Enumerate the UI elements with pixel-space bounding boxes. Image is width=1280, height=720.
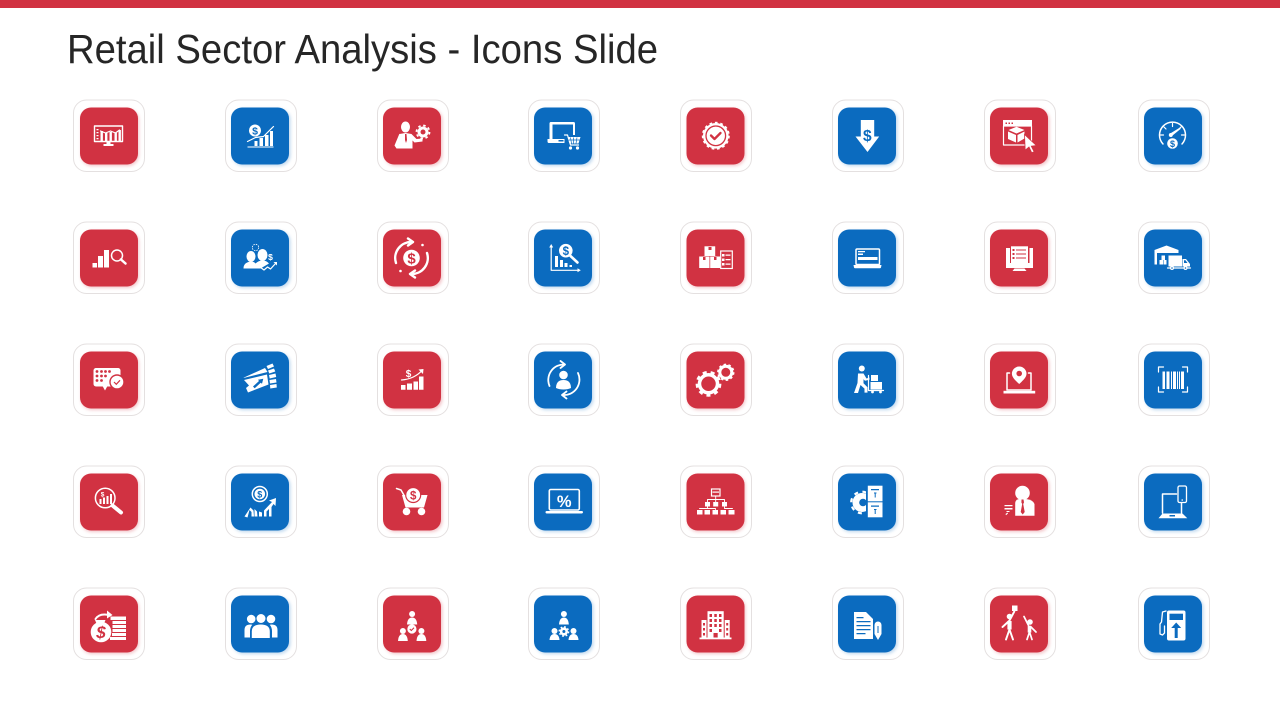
icon: monitor chart bbox=[94, 126, 122, 146]
icon: organization chart bbox=[697, 489, 734, 514]
tile: office building bbox=[680, 588, 752, 660]
tile: fuel pump up arrow bbox=[1138, 588, 1210, 660]
tile: coin with growth bbox=[226, 466, 296, 538]
icon: laptop discount: % bbox=[557, 493, 572, 511]
icon: gear with boxes bbox=[851, 485, 883, 518]
icon: laptop and cart bbox=[547, 122, 580, 150]
tile: adult and child reaching bbox=[984, 588, 1056, 660]
icon: team with dollar trend: $ bbox=[268, 252, 273, 262]
tile: team gear bbox=[528, 588, 600, 660]
tile: gear with boxes bbox=[832, 466, 904, 538]
icon: barcode scan bbox=[1158, 367, 1188, 392]
tile: boxes and checklist bbox=[680, 222, 752, 294]
tile: dollar growth chart bbox=[226, 100, 296, 172]
icon: dollar growth chart: $ bbox=[252, 126, 258, 138]
tile: two gears bbox=[680, 344, 752, 416]
tile: laptop and phone bbox=[1138, 466, 1210, 538]
tile: customer cycle bbox=[528, 344, 600, 416]
tile: worker pushing cart bbox=[832, 344, 904, 416]
title: Retail Sector Analysis - Icons Slide bbox=[67, 26, 658, 72]
icon: price down arrow: $ bbox=[863, 128, 872, 145]
icon: laptop screen bbox=[854, 249, 882, 268]
tile: laptop screen bbox=[832, 222, 904, 294]
tile: tickets and cash bbox=[226, 344, 296, 416]
icon: laptop location pin bbox=[1004, 366, 1035, 394]
icon: boxes and checklist bbox=[699, 246, 732, 268]
tile: financial magnifier bbox=[74, 466, 144, 538]
tile: dollar cycle bbox=[378, 222, 448, 294]
tile: warehouse and truck bbox=[1138, 222, 1210, 294]
icon: monitor checklist bbox=[1006, 246, 1033, 271]
icon: fuel pump up arrow bbox=[1160, 610, 1186, 640]
tile: chart with dollar magnifier bbox=[528, 222, 600, 294]
tile: laptop discount bbox=[528, 466, 600, 538]
icon: cost gauge: $ bbox=[1170, 139, 1175, 149]
icon: financial magnifier: $ bbox=[101, 492, 105, 498]
tile: organization chart bbox=[680, 466, 752, 538]
tile: laptop and cart bbox=[528, 100, 600, 172]
icon: businessman with gear bbox=[394, 122, 430, 148]
icon: chart with dollar magnifier: $ bbox=[563, 246, 570, 258]
tile: barcode scan bbox=[1138, 344, 1210, 416]
tile: businessman with gear bbox=[378, 100, 448, 172]
icon: rising revenue bars: $ bbox=[406, 369, 412, 380]
icon: team gear bbox=[550, 611, 578, 640]
tile: rising revenue bars bbox=[378, 344, 448, 416]
icon: businessman with notes bbox=[1004, 486, 1034, 516]
icon: money bag and coins: $ bbox=[95, 623, 106, 642]
tile: businessman with notes bbox=[984, 466, 1056, 538]
icon: warehouse and truck bbox=[1154, 246, 1190, 270]
icon: calendar chat check bbox=[94, 368, 124, 390]
tile: bars and magnifier bbox=[74, 222, 144, 294]
tile: web shop box and cursor bbox=[984, 100, 1056, 172]
icon: worker pushing cart bbox=[854, 366, 884, 393]
tile: monitor chart bbox=[74, 100, 144, 172]
top accent bar bbox=[0, 0, 1280, 8]
tile: group of people bbox=[226, 588, 296, 660]
tile: document and pen bbox=[832, 588, 904, 660]
tile: laptop location pin bbox=[984, 344, 1056, 416]
tile: monitor checklist bbox=[984, 222, 1056, 294]
icon: bars and magnifier bbox=[92, 250, 126, 268]
tile: team with dollar trend bbox=[226, 222, 296, 294]
icon: tickets and cash bbox=[244, 364, 277, 392]
icon: office building bbox=[700, 611, 732, 639]
tile: calendar chat check bbox=[74, 344, 144, 416]
icon: dollar shopping cart: $ bbox=[410, 490, 417, 502]
icon: adult and child reaching bbox=[1002, 606, 1036, 640]
tile: dollar shopping cart bbox=[378, 466, 448, 538]
tile: price down arrow bbox=[832, 100, 904, 172]
tile: cost gauge bbox=[1138, 100, 1210, 172]
icon: dollar cycle: $ bbox=[407, 250, 416, 268]
icon: web shop box and cursor bbox=[1003, 120, 1036, 153]
icon: document and pen bbox=[854, 612, 882, 640]
icon: laptop and phone bbox=[1158, 486, 1187, 518]
icon: group of people bbox=[244, 614, 278, 638]
icon: quality badge bbox=[703, 123, 729, 149]
tile: quality badge bbox=[680, 100, 752, 172]
icon: customer cycle bbox=[548, 361, 579, 398]
tile: money bag and coins bbox=[74, 588, 144, 660]
icon: coin with growth: $ bbox=[257, 489, 262, 499]
icon: two gears bbox=[697, 364, 734, 395]
icon: team check bbox=[398, 611, 426, 641]
tile: team check bbox=[378, 588, 448, 660]
